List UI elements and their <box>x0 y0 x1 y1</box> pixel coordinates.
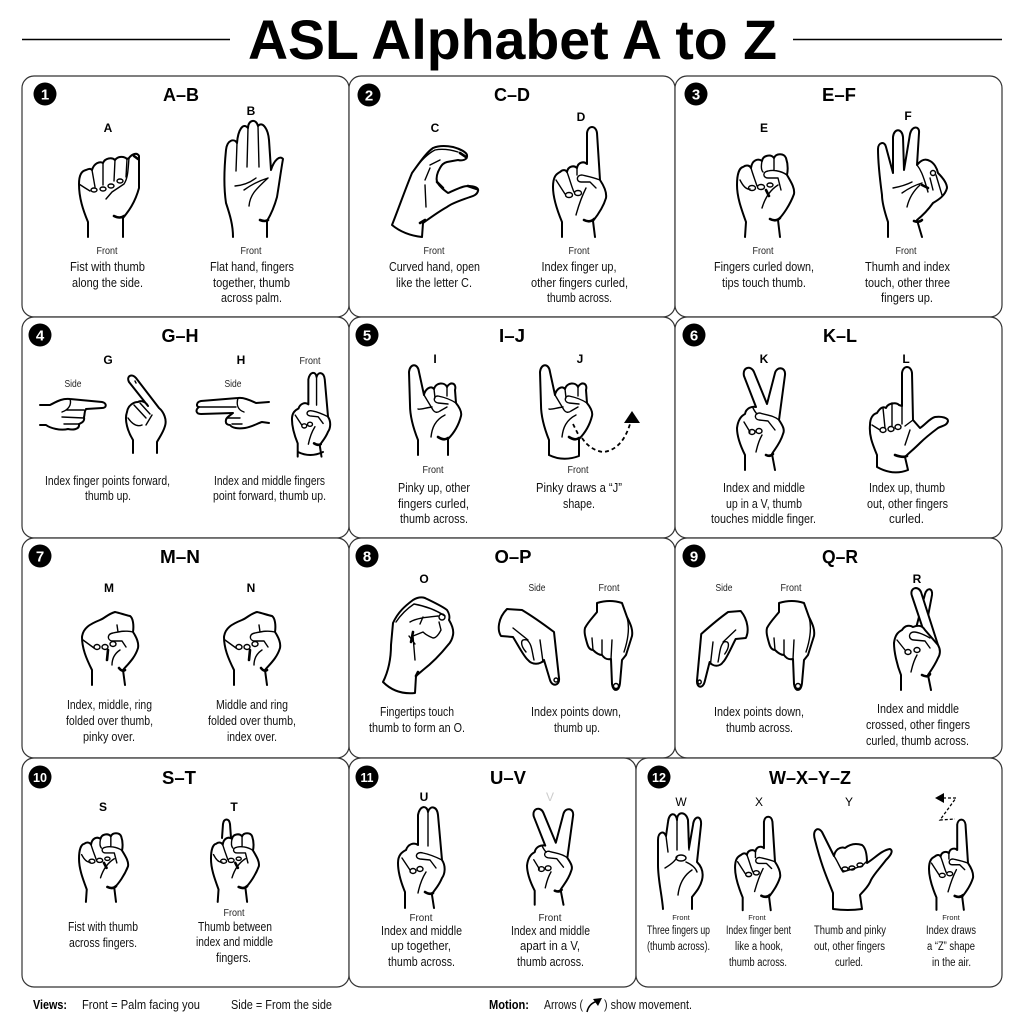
badge 3: 3 <box>692 86 700 104</box>
view label: Front <box>300 355 321 367</box>
badge 12: 12 <box>652 770 666 785</box>
description B <box>210 260 294 305</box>
description R: Index and middle <box>877 702 959 716</box>
description P: Index points down, <box>531 705 621 719</box>
description J <box>536 481 622 511</box>
description G: Index finger points forward, <box>45 474 170 488</box>
view label: Front <box>568 464 589 476</box>
description F: Thumh and index <box>865 260 951 274</box>
description T: index and middle <box>196 935 273 949</box>
badge 5: 5 <box>363 328 371 344</box>
heading A-B: A–B <box>163 85 199 105</box>
letter F: F <box>904 109 912 123</box>
letter V: V <box>546 790 554 804</box>
panel: G-H <box>22 317 349 538</box>
icon: hand C <box>392 146 478 237</box>
description N: index over. <box>227 730 277 744</box>
description U: up together, <box>391 939 451 953</box>
icon: hand V <box>527 809 573 905</box>
icon: hand U <box>398 807 445 908</box>
description D: other fingers curled, <box>531 276 628 290</box>
badge 9: 9 <box>690 548 698 566</box>
description U: Index and middle <box>381 924 462 938</box>
description L: out, other fingers <box>867 497 948 511</box>
icon: hand X <box>735 817 780 910</box>
description T: Thumb between <box>198 920 272 934</box>
description T <box>196 920 273 965</box>
panel: C-D <box>349 76 675 317</box>
icon: hand F <box>878 128 947 237</box>
icon: hand R <box>894 588 940 690</box>
panel: O-P <box>349 538 675 758</box>
badge 10: 10 <box>33 770 47 785</box>
icon: hand I <box>409 365 461 455</box>
description M: folded over thumb, <box>66 714 153 728</box>
description J: Pinky draws a “J” <box>536 481 622 495</box>
description V: thumb across. <box>517 955 584 969</box>
description X: thumb across. <box>729 957 787 969</box>
view label: Front <box>568 245 590 257</box>
icon: hand P front <box>585 601 632 690</box>
description F: fingers up. <box>881 291 933 305</box>
description I <box>398 481 470 526</box>
badge 10 <box>28 766 52 788</box>
letter X: X <box>755 795 763 809</box>
description P <box>531 705 621 735</box>
letter G: G <box>103 353 113 367</box>
view label: Front <box>896 245 917 257</box>
description P: thumb up. <box>554 721 600 735</box>
letter D: D <box>577 110 586 124</box>
letter H: H <box>237 353 245 367</box>
description W: (thumb across). <box>647 941 710 953</box>
description S: Fist with thumb <box>68 920 138 934</box>
description W: Three fingers up <box>647 925 710 937</box>
description H: Index and middle fingers <box>214 474 325 488</box>
icon: hand H side <box>197 398 269 428</box>
description I: thumb across. <box>400 512 468 526</box>
description Y: Thumb and pinky <box>814 925 886 937</box>
description V: Index and middle <box>511 924 590 938</box>
view label: Side <box>224 378 242 390</box>
heading S-T: S–T <box>162 768 196 788</box>
description H <box>213 474 326 503</box>
description I: fingers curled, <box>398 497 469 511</box>
view label: Front <box>224 907 245 919</box>
letter J: J <box>577 352 583 366</box>
badge 2: 2 <box>365 88 373 104</box>
description E <box>714 260 814 290</box>
icon: hand L <box>870 367 948 472</box>
view label: Front <box>424 245 445 257</box>
description U: thumb across. <box>388 955 455 969</box>
letter C: C <box>431 121 440 135</box>
description B: Flat hand, fingers <box>210 260 294 274</box>
panel: Q-R <box>675 538 1002 758</box>
badge 5 <box>356 324 378 346</box>
legend: motion <box>489 998 692 1012</box>
icon: hand H front <box>292 373 330 457</box>
heading I-J: I–J <box>499 326 525 346</box>
description A <box>70 260 145 290</box>
icon: hand B <box>224 121 283 237</box>
letter U: U <box>420 790 428 804</box>
view label: Front <box>96 245 118 257</box>
view label: Front <box>240 245 262 257</box>
view label: Front <box>780 582 802 594</box>
heading M-N: M–N <box>160 547 200 567</box>
description N <box>208 698 296 744</box>
panel: U-V <box>349 758 636 987</box>
description K <box>711 481 816 526</box>
icon: hand G front <box>126 375 166 453</box>
description O <box>369 705 465 735</box>
letter N: N <box>247 581 255 595</box>
legend: views: Side = From the side <box>231 998 332 1012</box>
description V <box>511 924 590 969</box>
description F: touch, other three <box>865 276 950 290</box>
arrow: J motion <box>573 411 640 452</box>
description F <box>865 260 951 305</box>
legend: motion: Motion: <box>489 998 529 1012</box>
legend: views: Views: <box>33 998 67 1012</box>
description B: together, thumb <box>213 276 290 290</box>
description M: pinky over. <box>83 730 135 744</box>
description L: Index up, thumb <box>869 481 945 495</box>
description K: Index and middle <box>723 481 805 495</box>
badge 1: 1 <box>41 86 49 104</box>
description I: Pinky up, other <box>398 481 470 495</box>
letter Y: Y <box>845 795 853 809</box>
letter A: A <box>104 121 113 135</box>
description D <box>531 260 628 305</box>
description N: Middle and ring <box>216 698 288 712</box>
badge 2 <box>358 84 380 106</box>
heading G-H: G–H <box>162 326 198 346</box>
description Z: a “Z” shape <box>927 941 975 953</box>
view label: Front <box>748 913 767 922</box>
heading E-F: E–F <box>822 85 856 105</box>
panel: I-J <box>349 317 675 538</box>
description A: Fist with thumb <box>70 260 145 274</box>
title: ASL Alphabet A to Z <box>248 8 777 71</box>
legend: motion: ) show movement. <box>604 998 692 1012</box>
description O: thumb to form an O. <box>369 721 465 735</box>
icon: hand Q front <box>767 601 814 690</box>
badge 4: 4 <box>36 328 45 344</box>
panel: M-N <box>22 538 349 758</box>
icon: hand W <box>658 813 703 909</box>
description D: Index finger up, <box>542 260 616 274</box>
description R: crossed, other fingers <box>866 718 970 732</box>
letter E: E <box>760 121 768 135</box>
description D: thumb across. <box>547 291 612 305</box>
view label: Front <box>422 464 444 476</box>
description T: fingers. <box>216 951 251 965</box>
description U <box>381 924 462 969</box>
badge 9 <box>682 544 706 568</box>
arrow: Z motion <box>935 793 956 820</box>
icon: hand Z <box>929 820 973 910</box>
letter L: L <box>902 352 910 366</box>
letter T: T <box>230 800 238 814</box>
badge 3 <box>684 82 708 106</box>
view label: Side <box>716 582 733 594</box>
heading U-V: U–V <box>490 768 526 788</box>
description Q: thumb across. <box>726 721 793 735</box>
badge 7: 7 <box>36 548 44 566</box>
icon: hand K <box>737 368 785 470</box>
view label: Front <box>672 913 691 922</box>
description G: thumb up. <box>85 489 131 503</box>
icon: hand S <box>79 833 128 902</box>
description S: across fingers. <box>69 936 137 950</box>
panel: S-T <box>22 758 349 987</box>
icon: hand Q side <box>697 611 748 687</box>
view label: Front <box>942 913 961 922</box>
letter O: O <box>419 572 429 586</box>
letter K: K <box>760 352 769 366</box>
description N: folded over thumb, <box>208 714 296 728</box>
icon: hand P side <box>499 609 559 685</box>
panel: E-F <box>675 76 1002 317</box>
description K: up in a V, thumb <box>726 497 802 511</box>
view label: Front <box>410 912 433 924</box>
legend: views: Front = Palm facing you <box>82 998 200 1012</box>
description V: apart in a V, <box>520 939 580 953</box>
badge 11 <box>356 766 378 788</box>
heading W-X-Y-Z: W–X–Y–Z <box>769 768 851 788</box>
badge 4 <box>28 324 52 346</box>
description X: Index finger bent <box>726 925 792 937</box>
icon: hand O <box>383 597 453 693</box>
heading Q-R: Q–R <box>822 547 858 567</box>
badge 11: 11 <box>360 770 374 785</box>
view label: Side <box>64 378 82 390</box>
icon: hand A <box>79 154 139 237</box>
description X <box>726 925 792 969</box>
description R: curled, thumb across. <box>866 734 969 748</box>
view label: Front <box>752 245 774 257</box>
description Z: Index draws <box>926 925 976 937</box>
icon: hand T <box>211 820 259 902</box>
description Z <box>926 925 976 969</box>
letter W: W <box>675 795 687 809</box>
icon: hand J <box>540 365 592 459</box>
description J: shape. <box>563 497 595 511</box>
description G <box>45 474 170 503</box>
description Y: curled. <box>835 957 863 969</box>
legend: motion: Arrows ( <box>544 998 584 1012</box>
panel: K-L <box>675 317 1002 538</box>
heading C-D: C–D <box>494 85 530 105</box>
description W <box>647 925 710 953</box>
description Y <box>814 925 886 969</box>
legend: views <box>33 998 332 1012</box>
description O: Fingertips touch <box>380 705 454 719</box>
description Y: out, other fingers <box>814 941 885 953</box>
letter B: B <box>247 104 256 118</box>
icon: hand E <box>737 154 794 237</box>
panel: W-X-Y-Z <box>636 758 1002 987</box>
badge 8 <box>356 544 378 568</box>
letter S: S <box>99 800 107 814</box>
icon: hand D <box>553 127 606 237</box>
description B: across palm. <box>221 291 282 305</box>
letter I: I <box>433 352 437 366</box>
description E: tips touch thumb. <box>722 276 806 290</box>
description C <box>389 260 480 290</box>
badge 6: 6 <box>690 328 698 344</box>
view label: Front <box>598 582 620 594</box>
description A: along the side. <box>72 276 143 290</box>
badge 1 <box>34 82 56 106</box>
letter M: M <box>104 581 114 595</box>
description S <box>68 920 138 950</box>
view label: Front <box>538 912 562 924</box>
description R <box>866 702 970 748</box>
icon: hand G side <box>40 399 106 430</box>
badge 8: 8 <box>363 548 371 566</box>
description X: like a hook, <box>735 941 783 953</box>
heading K-L: K–L <box>823 326 857 346</box>
description E: Fingers curled down, <box>714 260 814 274</box>
description L: curled. <box>889 512 924 526</box>
heading O-P: O–P <box>494 547 532 567</box>
icon: hand Y <box>814 829 892 910</box>
description C: Curved hand, open <box>389 260 480 274</box>
letter R: R <box>913 572 922 586</box>
description K: touches middle finger. <box>711 512 816 526</box>
description Q: Index points down, <box>714 705 804 719</box>
description C: like the letter C. <box>396 276 472 290</box>
description Q <box>714 705 804 735</box>
view label: Side <box>528 582 546 594</box>
icon: hand N <box>224 612 280 685</box>
badge 12 <box>648 766 670 788</box>
description L <box>867 481 948 526</box>
panel: A-B <box>22 76 349 317</box>
badge 6 <box>682 324 706 346</box>
icon: hand M <box>82 612 138 685</box>
description M: Index, middle, ring <box>67 698 152 712</box>
description M <box>66 698 153 744</box>
badge 7 <box>28 544 52 568</box>
description Z: in the air. <box>932 957 971 969</box>
description H: point forward, thumb up. <box>213 489 326 503</box>
